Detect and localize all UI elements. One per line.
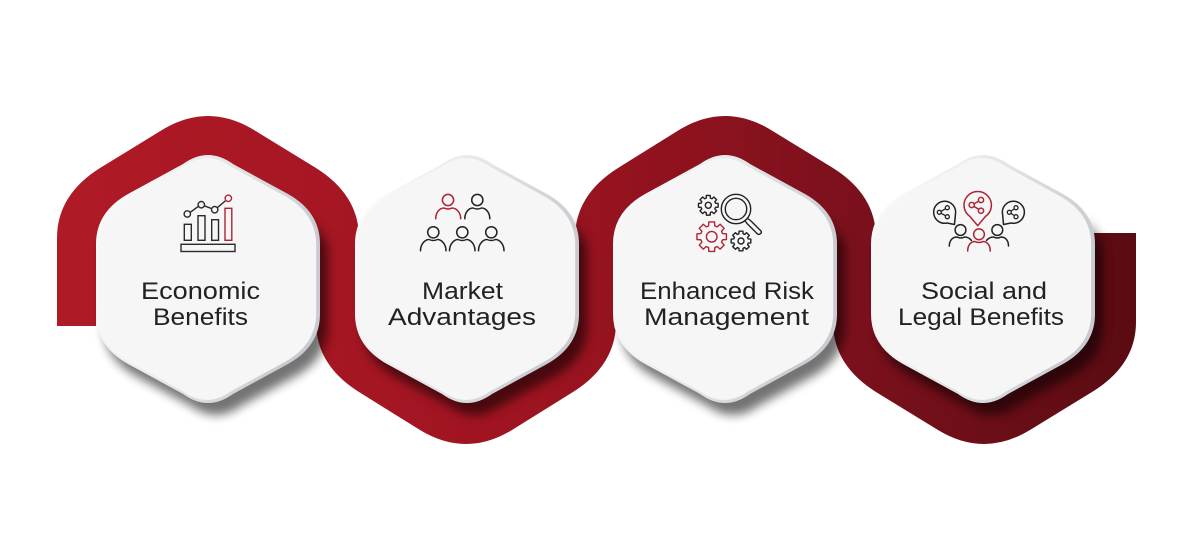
- heading: Economic Benefits: Benefits: [153, 304, 248, 331]
- heading: Market Advantages: Market: [422, 278, 503, 305]
- heading: Social and Legal Benefits: Legal Benefits: [898, 304, 1064, 331]
- panel: economic benefits: [96, 155, 328, 415]
- heading: Social and Legal Benefits: Social and: [921, 278, 1047, 305]
- heading: Economic Benefits: Economic: [141, 278, 260, 305]
- panel: enhanced risk management: [613, 155, 845, 415]
- icon: group of people: [420, 194, 504, 251]
- heading: Economic Benefits: [141, 278, 260, 331]
- icon: people sharing speech bubbles: [934, 191, 1024, 251]
- heading: Market Advantages: Advantages: [388, 304, 536, 331]
- panel: social and legal benefits: [871, 155, 1103, 415]
- heading: Enhanced Risk Management: [640, 278, 815, 331]
- panel: market advantages: [355, 155, 587, 415]
- icon: bar chart with trend line: [181, 195, 235, 252]
- heading: Enhanced Risk Management: Enhanced Risk: [640, 278, 815, 305]
- ribbon band: [57, 116, 1136, 444]
- heading: Enhanced Risk Management: Management: [644, 304, 809, 331]
- heading: Social and Legal Benefits: [898, 278, 1064, 331]
- icon: magnifier and gears: [697, 194, 761, 251]
- heading: Market Advantages: [388, 278, 536, 331]
